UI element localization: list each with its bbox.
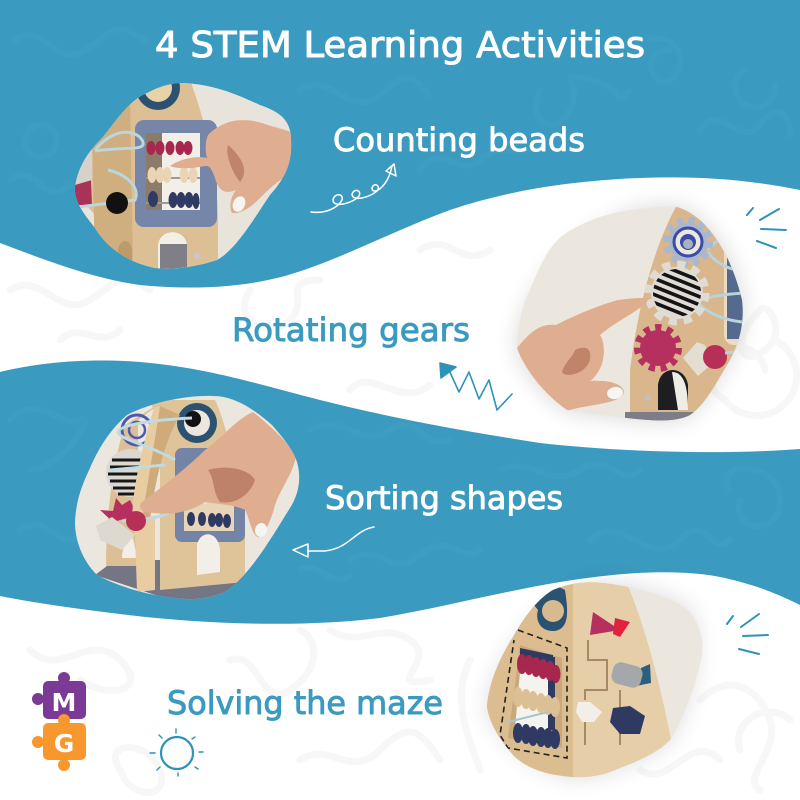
wires — [700, 240, 745, 322]
gear: blue — [122, 415, 152, 445]
slider: navy hex — [610, 706, 645, 734]
panel: rotating gears photo — [517, 206, 743, 420]
beads — [146, 141, 192, 155]
nail — [254, 523, 267, 537]
gear: striped — [106, 449, 142, 497]
slider: crimson pyramid — [590, 612, 620, 635]
hand — [170, 120, 295, 213]
logo: MG puzzle — [32, 672, 86, 771]
logo piece: purple — [32, 672, 86, 719]
panel: sorting shapes photo — [70, 390, 305, 605]
arches — [197, 534, 220, 575]
cube — [96, 517, 135, 550]
heading: solving the maze: Solving the maze — [167, 684, 443, 722]
wood tower — [86, 80, 218, 275]
porthole — [534, 588, 568, 631]
white band pattern: squiggles — [10, 244, 797, 792]
gear: pink — [638, 328, 678, 368]
wires and black bead — [78, 132, 143, 207]
wood tower — [630, 205, 750, 425]
heading: sorting shapes: Sorting shapes — [325, 479, 563, 517]
porthole — [138, 83, 180, 110]
icon: burst marks top — [747, 208, 786, 248]
icon: sun — [150, 729, 203, 776]
heading: rotating gears: Rotating gears — [232, 311, 470, 349]
cube and red bead — [683, 342, 708, 376]
logo piece: orange — [32, 714, 86, 771]
panel: solving the maze photo — [480, 580, 705, 780]
dashed outline — [500, 630, 567, 758]
base — [95, 560, 245, 601]
slider: white hex — [576, 702, 602, 722]
window — [508, 645, 562, 748]
front board — [132, 406, 160, 592]
beads — [517, 654, 560, 683]
abacus frame — [175, 448, 245, 542]
wood tower left — [106, 400, 165, 566]
icon: looped arrow — [311, 164, 396, 212]
hand — [517, 298, 647, 411]
blue band pattern: squiggles — [10, 29, 790, 579]
hand — [140, 412, 296, 537]
wood tower right — [150, 400, 245, 590]
gear: blue — [667, 221, 709, 263]
gear: pink — [100, 498, 133, 521]
logo: MG puzzle: M — [52, 688, 76, 717]
title: 4 STEM Learning Activities — [155, 25, 645, 66]
photo shadow: rotating gears — [517, 207, 742, 420]
photo shadow: solving the maze — [487, 583, 697, 777]
porthole — [177, 403, 217, 443]
band: middle blue wave — [0, 360, 800, 624]
gear: striped — [641, 262, 714, 321]
abacus frame — [135, 120, 217, 227]
icon: curved arrow — [293, 527, 374, 557]
nail — [232, 196, 246, 212]
icon: zigzag arrow — [440, 363, 512, 410]
arch and base — [158, 232, 187, 270]
maze slots — [585, 640, 620, 745]
band: top blue wave — [0, 0, 800, 288]
slider: grey cylinder — [636, 664, 651, 686]
nail: thumb — [607, 386, 623, 400]
red bead — [126, 511, 146, 531]
icon: burst marks bottom — [727, 614, 768, 654]
wood panels — [480, 580, 672, 780]
panel: counting beads photo — [74, 83, 292, 269]
wires — [110, 418, 192, 521]
arch and base — [658, 370, 688, 410]
logo: MG puzzle: G — [54, 729, 74, 758]
heading: counting beads: Counting beads — [333, 121, 585, 159]
